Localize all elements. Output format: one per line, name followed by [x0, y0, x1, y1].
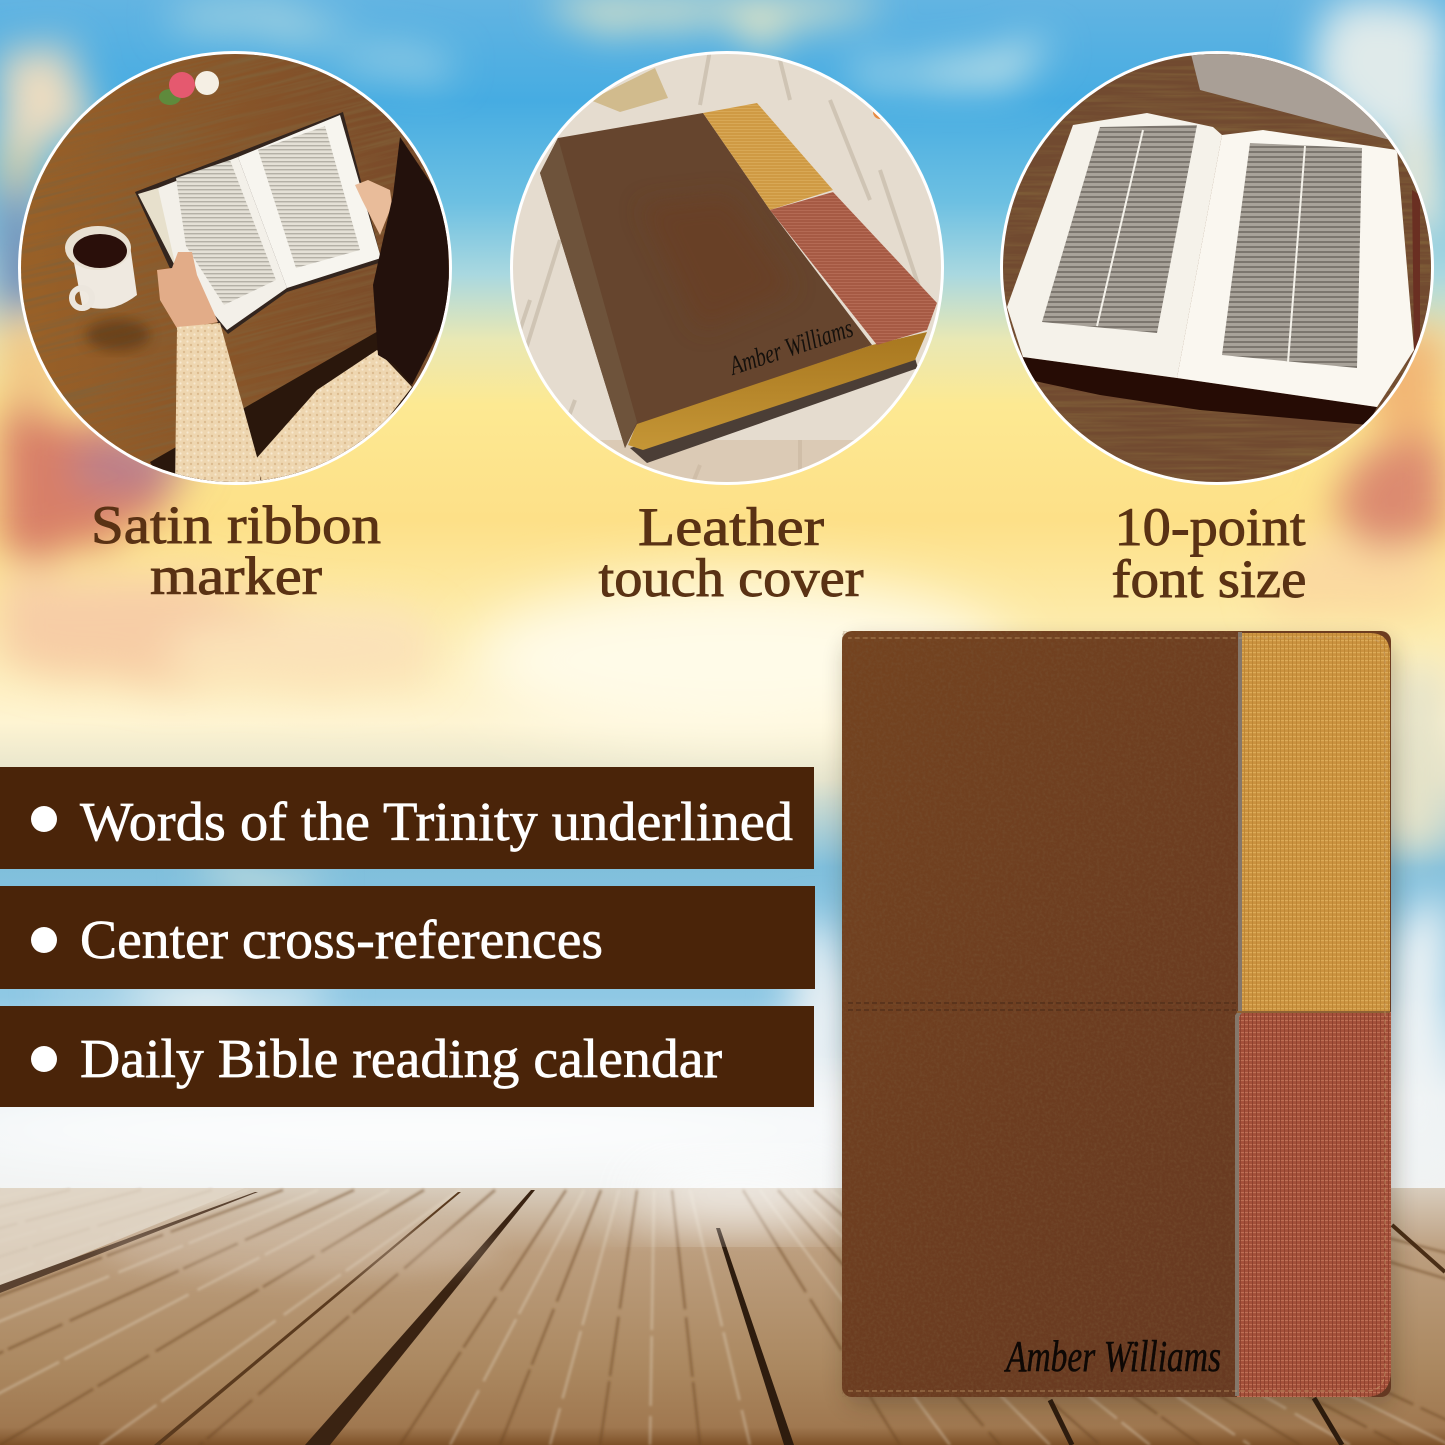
red panel	[1237, 1012, 1391, 1397]
photo circle: 10-point font size	[950, 0, 1445, 520]
open book	[135, 112, 382, 334]
cup shadow	[86, 319, 150, 351]
flower	[873, 112, 880, 119]
feature bar: center cross-references: Center cross-references	[80, 909, 603, 970]
feature bar: words of the Trinity: Words of the Trinity underlined	[80, 791, 793, 852]
feature bar: words of the Trinity	[0, 767, 814, 869]
hands	[157, 180, 392, 330]
engraved name: Amber Williams	[1004, 1332, 1221, 1381]
dark gap below table	[150, 332, 413, 482]
gold panel	[1241, 633, 1390, 1012]
open bible pages	[1007, 113, 1414, 407]
heading: leather touch cover: Leather	[638, 497, 824, 557]
book cover: Amber Williams	[724, 313, 857, 381]
hair	[373, 137, 450, 385]
heading: leather touch cover: touch cover	[598, 548, 864, 608]
plank gaps	[0, 1192, 258, 1293]
heading: leather touch cover	[598, 497, 864, 608]
photo circle: leather touch cover	[505, 50, 950, 490]
wood grain lines	[0, 1190, 1445, 1445]
book cover	[540, 103, 937, 448]
heading: 10-point font size	[1112, 497, 1306, 609]
heading: satin ribbon marker: marker	[150, 546, 322, 606]
icon: flowers	[159, 71, 219, 105]
photo circle: satin ribbon marker	[18, 51, 452, 485]
page edge	[628, 332, 927, 450]
wooden table	[0, 1169, 1445, 1445]
feature bar: center cross-references	[0, 886, 815, 989]
sweater	[255, 350, 412, 492]
heading: 10-point font size: 10-point	[1114, 497, 1306, 557]
feature bar: daily reading calendar: Daily Bible reading calendar	[80, 1028, 722, 1089]
feature bar: daily reading calendar	[0, 1006, 814, 1107]
pale plank corner	[0, 1188, 245, 1288]
silver table top	[1190, 50, 1435, 190]
coffee mug	[65, 226, 137, 309]
heading: satin ribbon marker: Satin ribbon	[91, 495, 381, 555]
book bottom cover	[630, 358, 918, 463]
product: bible cover	[842, 631, 1394, 1404]
heading: satin ribbon marker	[91, 495, 381, 606]
right cover strip	[1412, 190, 1420, 350]
heading: 10-point font size: font size	[1112, 549, 1306, 609]
shadow under book	[1023, 357, 1377, 425]
sleeve	[175, 323, 262, 490]
mist over wood	[630, 1169, 850, 1221]
fringe	[590, 68, 668, 112]
